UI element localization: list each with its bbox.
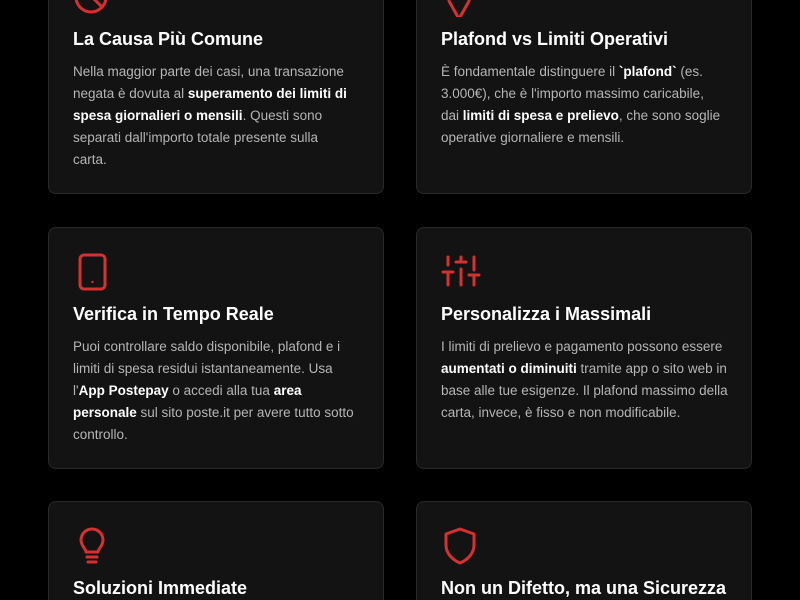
text: I limiti di prelievo e pagamento possono essere aumentati o diminuiti tramite app o sito web in base alle tue esigenze. Il plafond massimo della carta, invece, è fisso e non modificabile. [441,339,728,420]
icon: no sign [74,0,108,14]
icon: phone [78,254,106,290]
icon: lightbulb [80,528,104,564]
card: verifica [48,227,384,469]
icon: shield [444,528,476,564]
title: La Causa Più Comune [73,29,263,49]
title: Non un Difetto, ma una Sicurezza [441,578,726,598]
icon: sliders [442,256,480,286]
icon: marker [447,0,471,17]
title: Soluzioni Immediate [73,578,247,598]
card: la causa [48,0,384,194]
text: Nella maggior parte dei casi, una transazione negata è dovuta al superamento dei limiti di spesa giornalieri o mensili. Questi sono separati dall'importo totale presente sulla carta. [73,64,347,167]
card: soluzioni [48,501,384,600]
text: È fondamentale distinguere il `plafond` (es. 3.000€), che è l'importo massimo caricabile, dai limiti di spesa e prelievo, che sono soglie operative giornaliere e mensili. [441,64,720,145]
title: Verifica in Tempo Reale [73,304,274,324]
card: sicurezza [416,501,752,600]
card: personalizza [416,227,752,469]
card: plafond [416,0,752,194]
title: Personalizza i Massimali [441,304,651,324]
title: Plafond vs Limiti Operativi [441,29,668,49]
text: Puoi controllare saldo disponibile, plafond e i limiti di spesa residui istantaneamente. Usa l'App Postepay o accedi alla tua area personale sul sito poste.it per avere tutto sotto controllo. [73,339,354,442]
